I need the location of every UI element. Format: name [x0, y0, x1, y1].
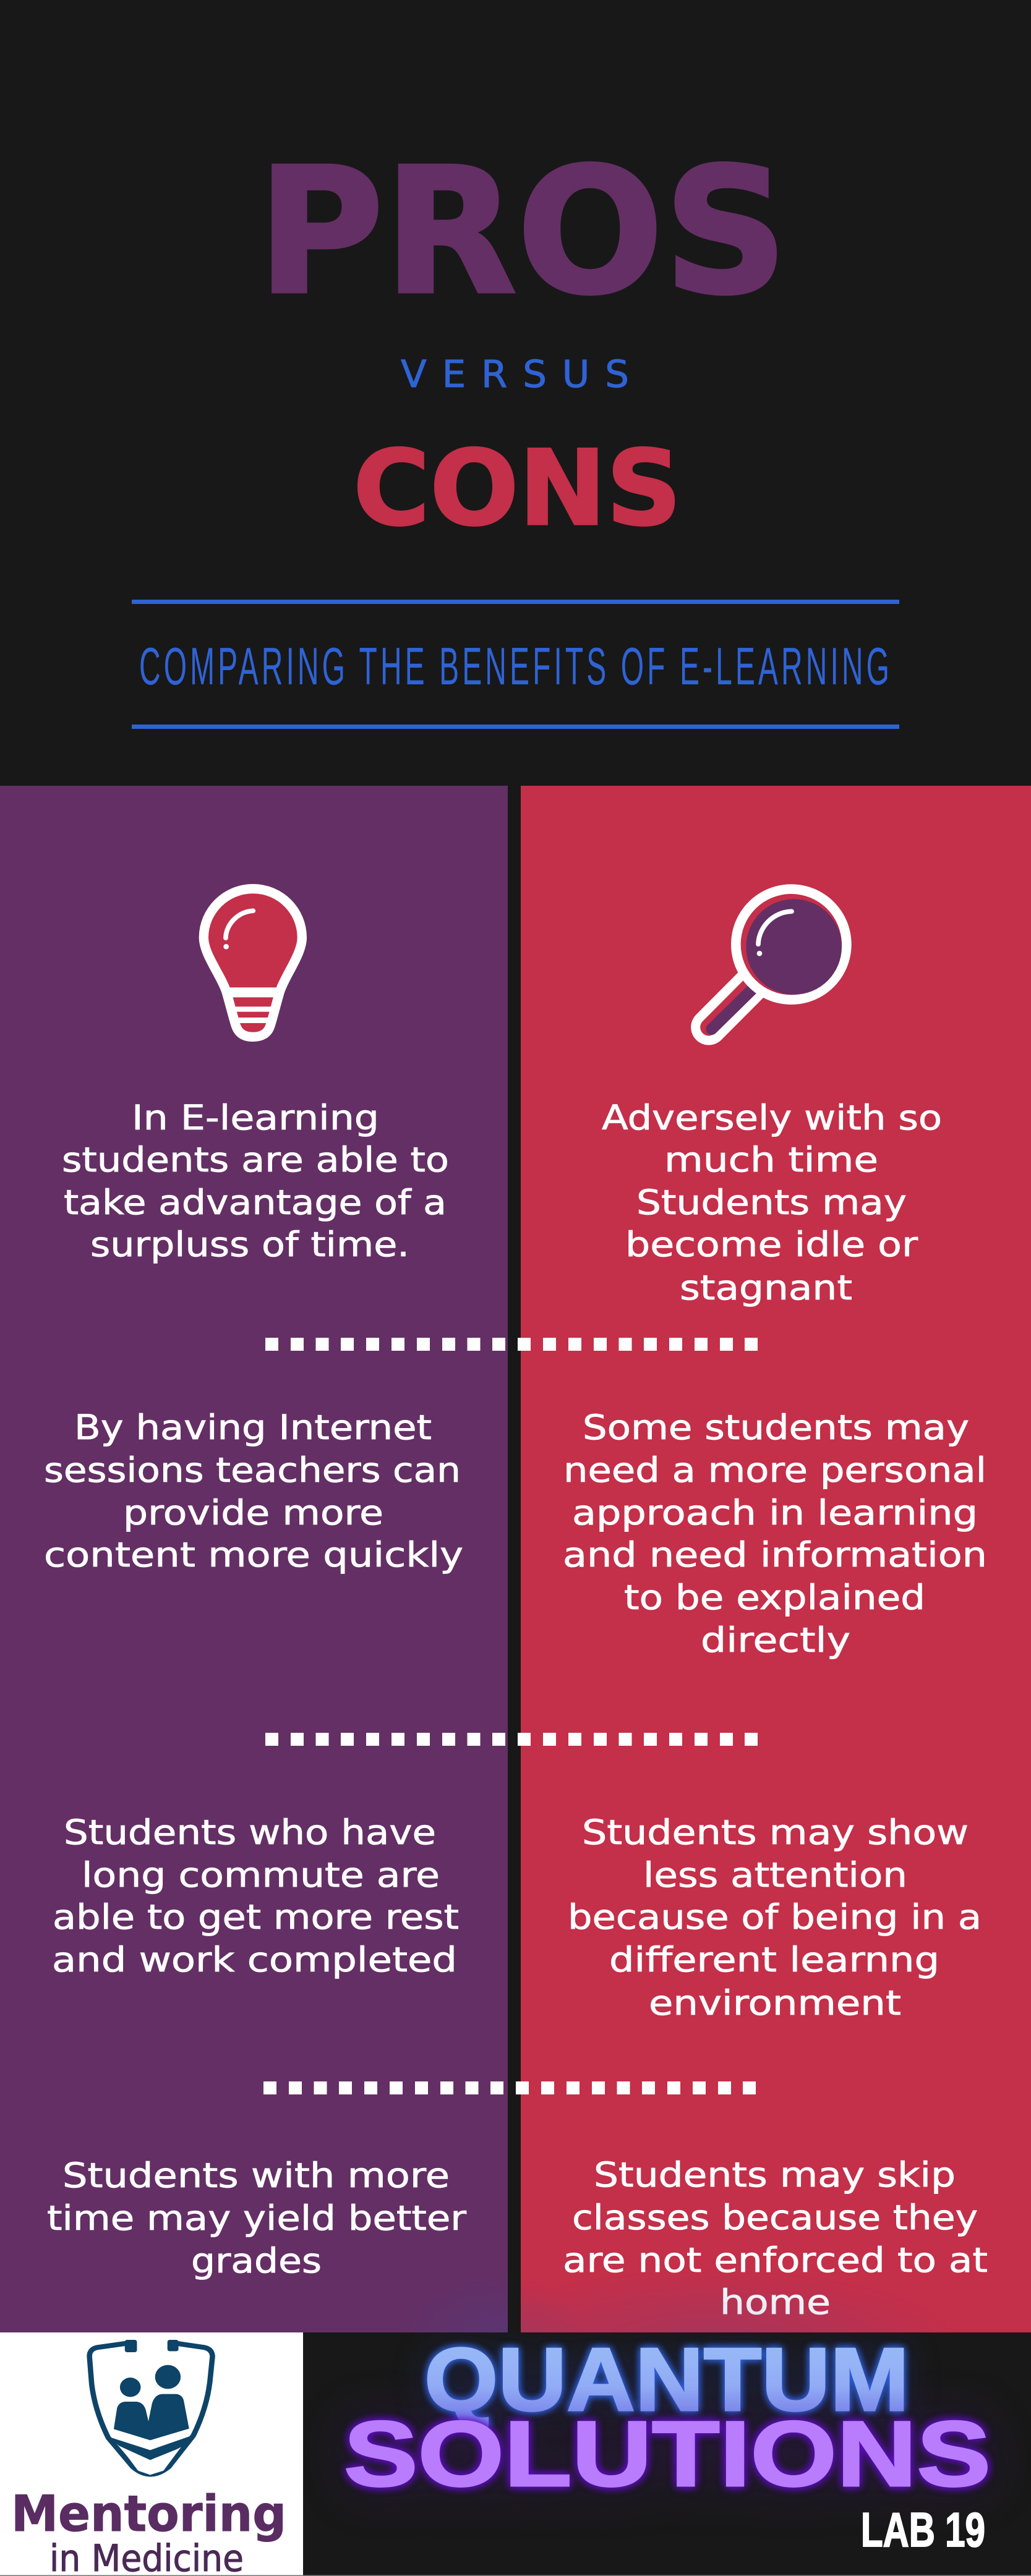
con text: skip classes: classes because they — [572, 2198, 978, 2237]
pro text: internet sessions: provide more — [123, 1493, 383, 1532]
wordmark: SOLUTIONS: SOLUTIONS — [344, 2402, 991, 2506]
brand background — [303, 2332, 1031, 2576]
icon: light bulb — [203, 889, 307, 1037]
title: PROS: PROS — [257, 131, 788, 333]
panel: cons — [521, 786, 1031, 2332]
icon: magnifying glass — [709, 884, 852, 1029]
con text: idle or stagnant: Adversely with so — [602, 1098, 942, 1137]
pro text: internet sessions: sessions teachers can — [44, 1450, 461, 1490]
wordmark: QUANTUM: QUANTUM — [424, 2329, 909, 2429]
con text: personal approach: to be explained — [624, 1578, 925, 1617]
con text: skip classes: Students may skip — [594, 2155, 956, 2195]
con text: personal approach: need a more personal — [563, 1450, 986, 1490]
pro text: surplus of time — [62, 1098, 449, 1264]
con text: skip classes: home — [720, 2282, 831, 2322]
con text: less attention: different learnng — [609, 1940, 939, 1979]
con text: personal approach: directly — [701, 1620, 850, 1660]
pro text: long commute: able to get more rest — [53, 1897, 459, 1937]
logo wordmark: Mentoring: Mentoring — [11, 2485, 286, 2543]
con text: less attention — [568, 1813, 982, 2023]
pro text: better grades: time may yield better — [47, 2198, 466, 2238]
bottom panel glow — [396, 2225, 959, 2417]
title: CONS: CONS — [353, 428, 682, 549]
pro text: surplus of time: students are able to — [62, 1140, 449, 1180]
logo background — [0, 2332, 303, 2576]
con text: skip classes: are not enforced to at — [563, 2240, 988, 2280]
footer: Mentoring in Medicine logo — [0, 2332, 303, 2576]
con text: idle or stagnant: Students may — [636, 1183, 907, 1222]
cons background — [521, 786, 1031, 2332]
con text: idle or stagnant — [602, 1098, 942, 1307]
pro text: better grades — [47, 2156, 466, 2281]
con text: less attention: because of being in a — [568, 1897, 982, 1937]
pro text: better grades: grades — [191, 2241, 322, 2281]
pro text: long commute: and work completed — [52, 1940, 457, 1979]
header background — [0, 0, 1031, 786]
pro text: better grades: Students with more — [62, 2156, 450, 2195]
con text: personal approach: and need information — [563, 1535, 987, 1575]
dotted separators — [263, 1338, 758, 2094]
con text: skip classes — [563, 2155, 988, 2322]
logo shield emblem — [90, 2340, 213, 2475]
header section — [0, 0, 1031, 786]
pro text: long commute: long commute are — [82, 1855, 440, 1895]
pro text: long commute: Students who have — [64, 1813, 436, 1852]
con text: less attention: environment — [649, 1983, 901, 2023]
pro text: internet sessions — [44, 1408, 463, 1575]
pro text: long commute — [52, 1813, 459, 1979]
pro text: surplus of time: surpluss of time. — [90, 1225, 409, 1264]
con text: personal approach — [563, 1408, 987, 1660]
pro text: surplus of time: take advantage of a — [64, 1183, 447, 1222]
con text: idle or stagnant: stagnant — [680, 1268, 852, 1307]
pros background — [0, 786, 508, 2332]
con text: less attention: Students may show — [582, 1813, 969, 1852]
con text: personal approach: approach in learning — [572, 1493, 978, 1532]
label: LAB 19: LAB 19 — [861, 2502, 985, 2557]
pro text: internet sessions: content more quickly — [44, 1535, 463, 1575]
footer: Quantum Solutions brand — [303, 2329, 1031, 2576]
pro text: surplus of time: In E-learning — [132, 1098, 379, 1137]
separator row 2 — [265, 1733, 758, 1746]
con text: idle or stagnant: much time — [664, 1140, 878, 1180]
pro text: internet sessions: By having Internet — [74, 1408, 432, 1447]
separator row 3 — [263, 2081, 756, 2094]
con text: idle or stagnant: become idle or — [625, 1225, 918, 1264]
con text: personal approach: Some students may — [583, 1408, 969, 1447]
con text: less attention: less attention — [643, 1855, 907, 1895]
panel: pros — [0, 786, 508, 2332]
title: VERSUS: VERSUS — [401, 352, 629, 396]
separator row 1 — [265, 1338, 758, 1351]
